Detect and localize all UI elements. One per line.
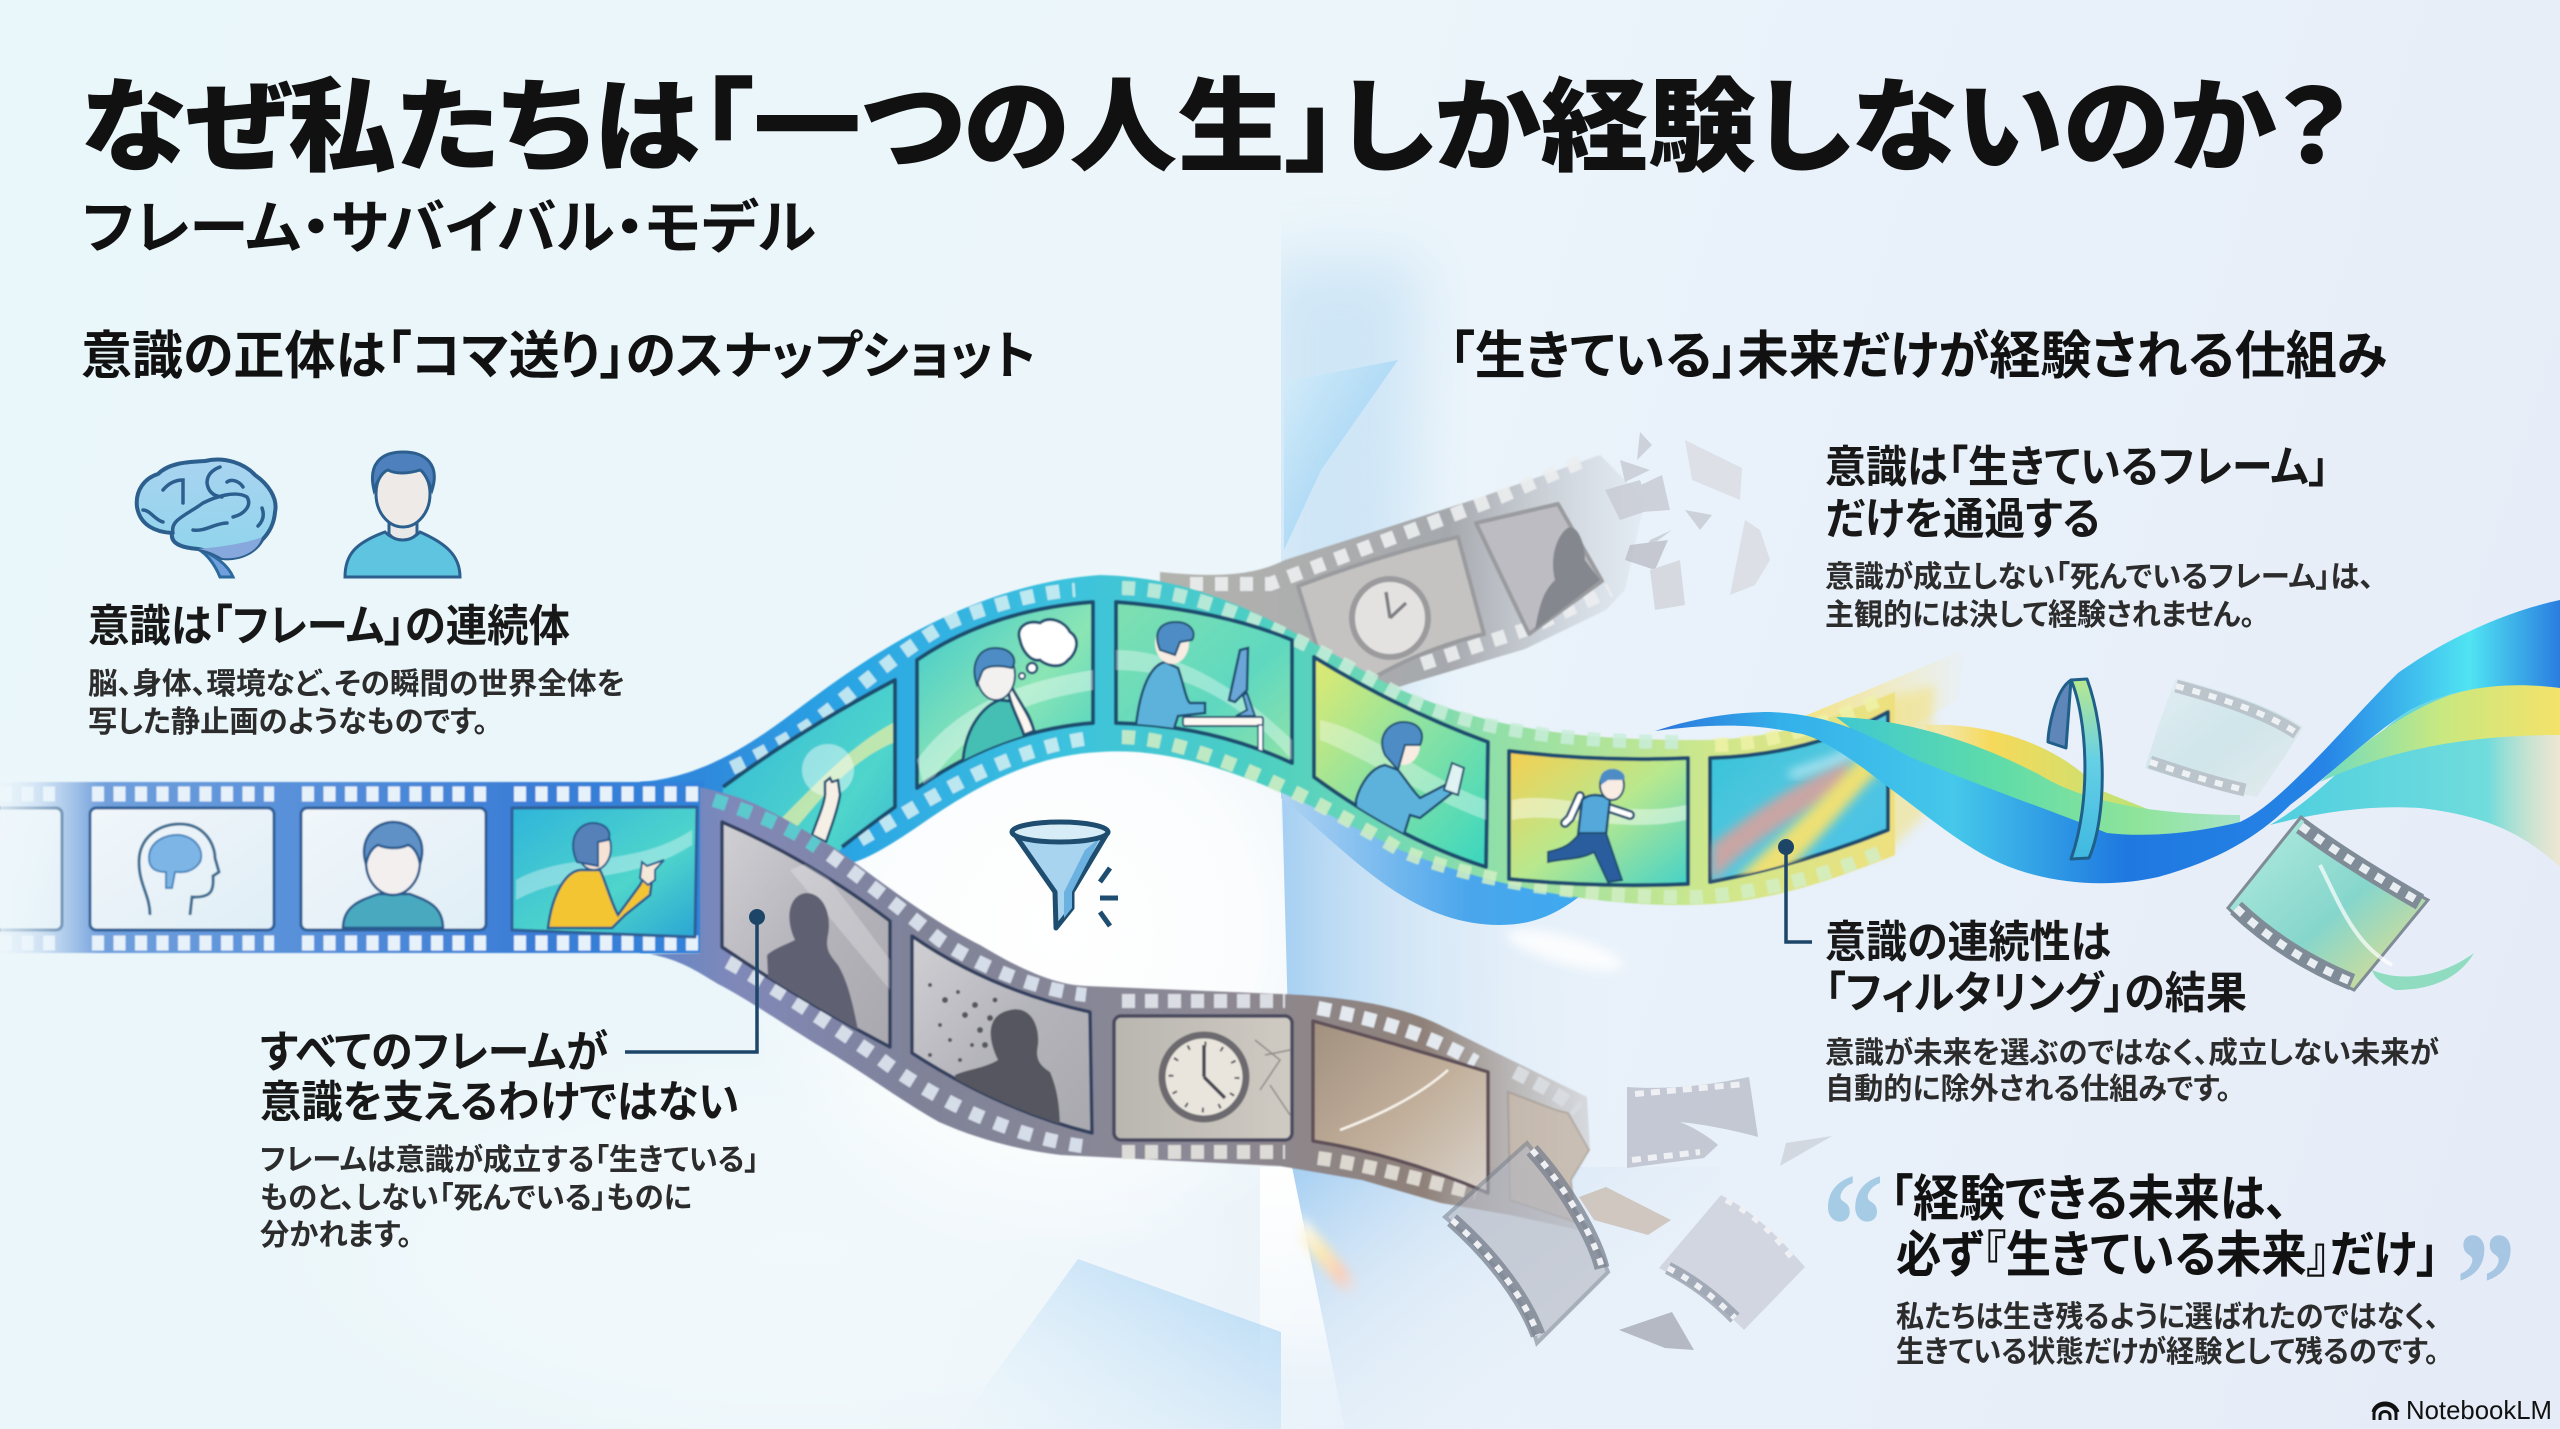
frame: scratched brown — [1313, 1021, 1488, 1193]
frame: front-facing person — [301, 808, 486, 930]
frame: runner — [1509, 751, 1688, 885]
ring front — [2071, 679, 2102, 859]
text block: living frames — [1825, 443, 2374, 632]
yellow green ribbon band — [1925, 725, 2170, 840]
callout: not all frames: ものと、しない「死んでいる」ものに — [260, 1182, 692, 1215]
floating frame: pale — [2145, 678, 2303, 797]
left section heading: 意識の正体は「コマ送り」のスナップショット — [81, 328, 1036, 386]
quote block: 必ず『生きている未来』だけ」 — [1896, 1227, 2439, 1283]
left fade — [0, 775, 95, 960]
icon: funnel — [1012, 822, 1118, 928]
callout: filtering: 意識の連続性は — [1825, 918, 2111, 967]
logo: NotebookLM: NotebookLM — [2406, 1395, 2552, 1425]
leader line — [625, 917, 757, 1052]
callout: filtering — [1778, 839, 2439, 1106]
frame: thinking person — [917, 602, 1093, 790]
text block: living frames: だけを通過する — [1825, 495, 2100, 544]
frame: person in yellow — [512, 807, 697, 937]
subtitle: フレーム・サバイバル・モデル — [82, 196, 816, 261]
callout: not all frames: すべてのフレームが — [260, 1028, 608, 1077]
callout: filtering: 「フィルタリング」の結果 — [1825, 969, 2247, 1018]
quote block: 「経験できる未来は、 — [1890, 1171, 2288, 1227]
right section heading: 「生きている」未来だけが経験される仕組み — [1449, 328, 2387, 386]
film strip: left straight section — [0, 775, 704, 960]
text block: frames continuum: 脳、身体、環境など、その瞬間の世界全体を — [88, 668, 625, 701]
text block: living frames: 意識が成立しない「死んでいるフレーム」は、 — [1825, 560, 2374, 594]
frame: dissolving silhouette — [912, 936, 1092, 1133]
callout: not all frames — [260, 909, 765, 1252]
quote block: ” — [2456, 1202, 2516, 1368]
ribbon: blue light stream — [1655, 600, 2560, 883]
quote block: “ — [1822, 1143, 1884, 1309]
frame: fading end — [1508, 1092, 1589, 1222]
icon: person — [345, 452, 460, 577]
text block: living frames: 意識は「生きているフレーム」 — [1825, 443, 2329, 492]
icon: clock faded — [1352, 579, 1428, 657]
film strip: living frames — [640, 575, 1895, 960]
quote block — [1822, 1143, 2516, 1369]
text block: frames continuum: 写した静止画のようなものです。 — [88, 706, 488, 739]
swoosh: yellow tail — [1790, 650, 1964, 738]
right ribbon cyan band — [2270, 685, 2560, 867]
frame: cracked clock — [1114, 1016, 1292, 1140]
callout: filtering: 意識が未来を選ぶのではなく、成立しない未来が — [1825, 1036, 2439, 1070]
text block: frames continuum — [88, 602, 625, 739]
background — [806, 246, 2560, 1429]
sprockets: dead strip — [714, 800, 1578, 1193]
frame: head with brain — [90, 808, 274, 930]
swoosh: yellow strip end — [1880, 685, 1935, 860]
sprockets: living strip — [732, 588, 1885, 897]
text block: frames continuum: 意識は「フレーム」の連続体 — [88, 602, 570, 651]
callout: filtering: 自動的に除外される仕組みです。 — [1825, 1073, 2231, 1106]
text block: living frames: 主観的には決して経験されません。 — [1825, 599, 2255, 632]
ring back — [2048, 680, 2074, 859]
frame: person at desk — [1116, 602, 1292, 763]
icon: brain — [137, 459, 276, 577]
fragments: lower dead film — [1445, 1077, 1832, 1350]
floating frame: iridescent — [2228, 817, 2474, 990]
frame: person with phone — [1314, 657, 1488, 867]
sprockets: straight strip — [0, 794, 700, 943]
callout: not all frames: 分かれます。 — [260, 1219, 412, 1252]
right ribbon yellow band — [2320, 685, 2560, 782]
fragments: upper dead film — [1605, 432, 1770, 610]
swoosh: blue under strip — [1281, 792, 1579, 925]
frame: silhouette — [722, 822, 890, 1047]
callout: not all frames: 意識を支えるわけではない — [260, 1078, 739, 1127]
callout: not all frames: フレームは意識が成立する「生きている」 — [260, 1143, 759, 1177]
dead strip upper (fragmenting) — [1160, 455, 1645, 720]
film strip: dead frames — [650, 787, 1590, 1230]
quote block: 私たちは生き残るように選ばれたのではなく、 — [1896, 1301, 2439, 1334]
title: なぜ私たちは「一つの人生」しか経験しないのか？ — [80, 71, 2351, 185]
leader line — [1786, 847, 1812, 942]
frame: raised hand — [722, 683, 894, 852]
frame: iridescent light — [1710, 712, 1888, 882]
frame partial — [0, 808, 62, 930]
quote block: 生きている状態だけが経験として残るのです。 — [1896, 1335, 2439, 1369]
